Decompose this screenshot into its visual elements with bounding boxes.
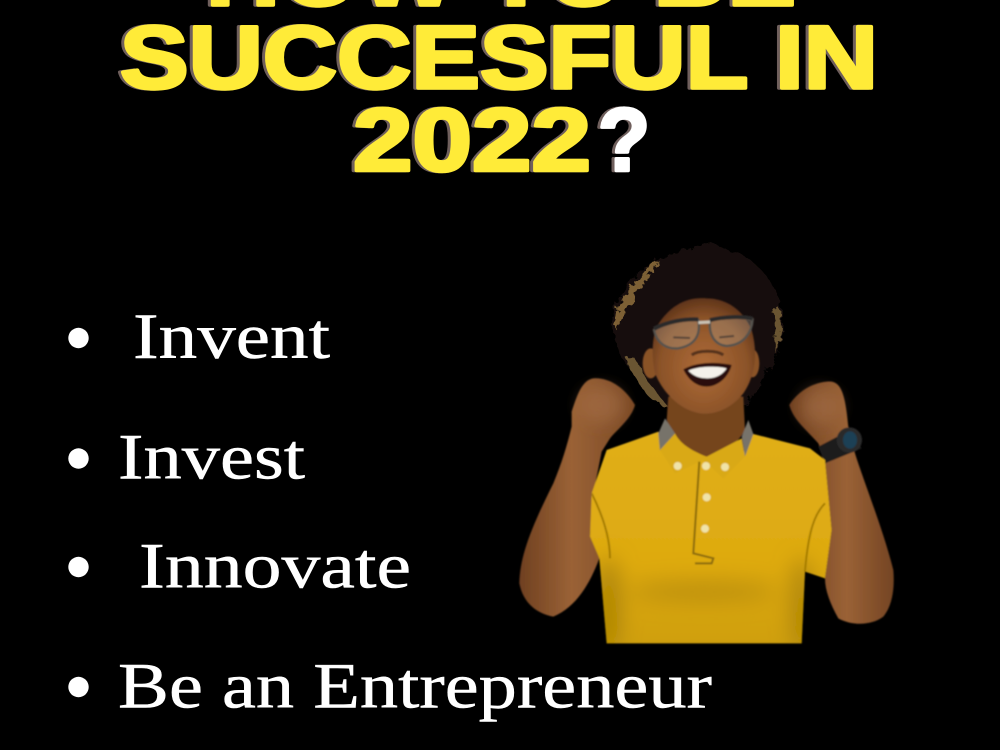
buttons [674,462,729,533]
hair [613,242,784,407]
bullet: Innovate: Innovate [139,530,411,602]
face [653,298,755,414]
placket [693,462,713,563]
title: SUCCESFUL IN [120,7,878,107]
bullet list [68,301,712,722]
neck [667,397,745,458]
yellow shirt [590,432,832,657]
fist highlights [580,387,840,425]
bullet: Invest: Invest [118,422,305,494]
bullet: Innovate [68,530,411,602]
bullet: Invest [68,422,305,494]
title: 2022 [353,90,591,190]
left arm and fist [519,378,635,617]
collar [658,418,753,478]
smile [683,363,732,387]
title [120,0,878,190]
glasses [654,317,753,348]
title: ? [598,90,650,190]
right arm and fist [789,381,894,624]
illustration: celebrating man in yellow shirt [519,242,894,657]
bullet: Invent: Invent [133,301,330,373]
eyes and nose [673,336,734,355]
bullet: Be an Entrepreneur: Be an Entrepreneur [118,650,712,722]
watch [818,427,862,463]
ears [643,348,659,378]
bullet: Invent [68,301,330,373]
